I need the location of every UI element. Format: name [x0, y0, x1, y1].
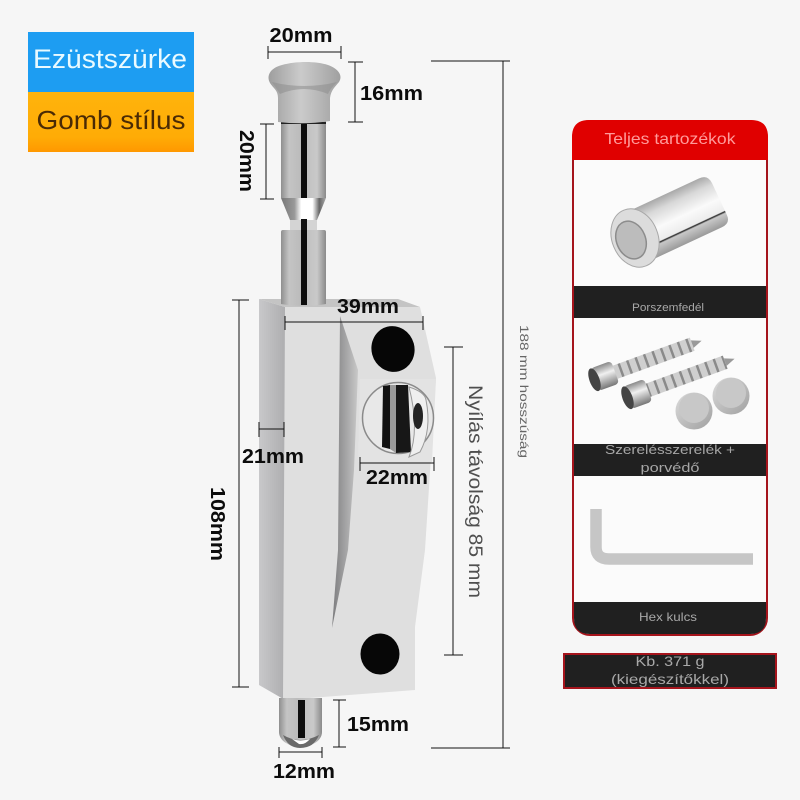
dimension: pin length 15mm — [333, 700, 409, 747]
rotary latch — [362, 382, 434, 457]
dimension: body width 39mm — [285, 295, 423, 330]
dimension: pin diameter 12mm: 12mm — [273, 760, 335, 783]
icon: screws and caps — [586, 329, 750, 430]
colour label: Ezüstszürke — [33, 44, 187, 74]
panel header — [572, 120, 768, 160]
bottom mounting hole — [360, 634, 400, 674]
bolt knob — [268, 62, 341, 123]
caption: dust cover: Porszemfedél — [632, 302, 704, 314]
body ridge shadow — [332, 316, 358, 628]
body top face — [259, 299, 420, 307]
colour and style badge — [28, 32, 194, 152]
dimension: side 21mm: 21mm — [242, 445, 304, 468]
dimension: knob height 16mm: 16mm — [360, 82, 423, 105]
dimension: body width 39mm: 39mm — [337, 295, 399, 318]
dimension: knob width 20mm: 20mm — [270, 24, 332, 47]
caption: mounting hardware: Szerelésszerelék + — [605, 442, 735, 457]
dimension: side 21mm — [242, 422, 304, 468]
dimension: total length 188 mm — [431, 61, 531, 748]
dimension: knob height 16mm — [348, 62, 423, 122]
dimension: latch 22mm — [360, 457, 434, 489]
panel: accessories — [572, 120, 768, 635]
weight note — [564, 653, 776, 688]
dimension: body height 108mm — [206, 300, 249, 687]
panel header: Teljes tartozékok — [604, 131, 737, 148]
caption: mounting hardware: porvédő — [640, 460, 700, 475]
icon: hex key — [596, 509, 753, 559]
style label: Gomb stílus — [36, 105, 186, 135]
panel card — [573, 121, 767, 635]
dimension: knob width 20mm — [268, 24, 341, 59]
top mounting hole — [366, 321, 420, 377]
caption: dust cover — [574, 286, 766, 318]
dimension: pin diameter 12mm — [273, 747, 335, 783]
dimension: total length 188 mm: 188 mm hosszúság — [517, 325, 531, 458]
dimension: latch 22mm: 22mm — [366, 466, 428, 489]
dimension: body height 108mm: 108mm — [206, 487, 229, 561]
icon: dust cover sleeve — [602, 174, 731, 274]
weight note: (kiegészítőkkel) — [611, 671, 729, 687]
dimension: hole distance 85 mm — [444, 347, 485, 655]
caption: hex key: Hex kulcs — [639, 610, 697, 624]
style label — [28, 92, 194, 152]
dimension: shaft 20mm — [235, 124, 274, 199]
colour label — [28, 32, 194, 92]
caption: mounting hardware — [574, 442, 766, 476]
dimension: pin length 15mm: 15mm — [347, 713, 409, 736]
dimension: shaft 20mm: 20mm — [235, 130, 258, 192]
weight note: Kb. 371 g — [636, 653, 704, 669]
bottom pin — [279, 698, 322, 748]
redraw shaft base over top face — [281, 296, 326, 306]
body front face — [283, 307, 436, 700]
bolt shaft — [281, 121, 326, 306]
dimension: hole distance 85 mm: Nyílás távolság 85 mm — [464, 385, 485, 598]
caption: hex key — [574, 602, 766, 634]
product: door bolt — [259, 62, 436, 748]
knob panel — [358, 379, 436, 462]
body side face — [259, 299, 285, 700]
